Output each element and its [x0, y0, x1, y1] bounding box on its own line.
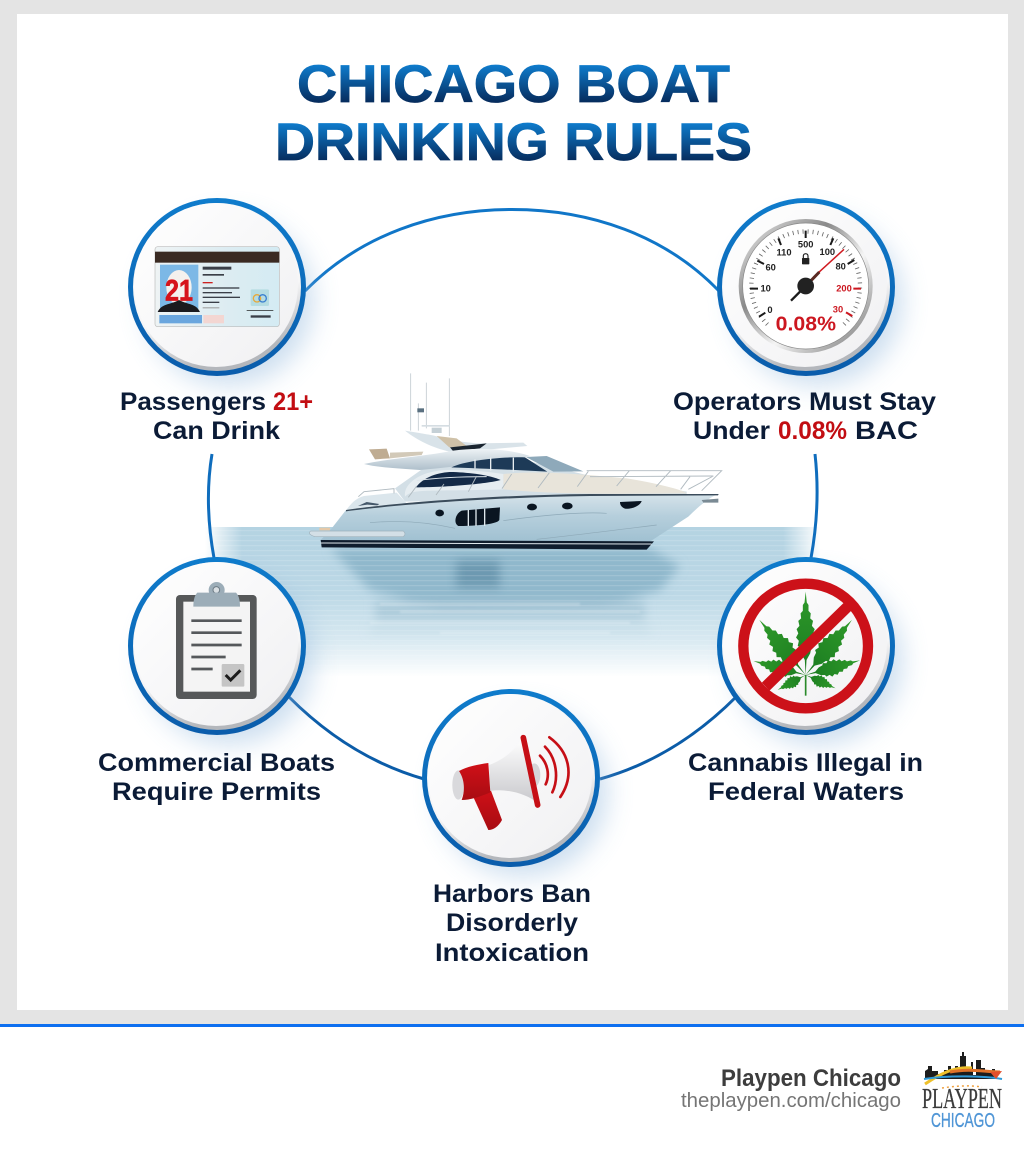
badge shadow [145, 217, 313, 385]
minor ticks [751, 231, 860, 324]
label: harbors: Intoxication [435, 939, 589, 967]
bow anchor [702, 499, 718, 503]
icon: gauge: 200 [836, 284, 852, 294]
masts [411, 373, 449, 436]
side windows [416, 472, 501, 487]
icon: gauge: 30 [833, 304, 843, 314]
label: cannabis: Cannabis Illegal in [688, 749, 923, 777]
icon: gauge: 10 [760, 284, 771, 294]
badge shadow [145, 576, 313, 744]
icon: ID card: 21 [165, 275, 193, 308]
badge rim [133, 203, 301, 371]
skyline [925, 1052, 995, 1079]
badge ring [128, 198, 306, 376]
label: operators: Operators Must Stay [673, 388, 936, 416]
icon: gauge: 0.08% [776, 313, 836, 336]
label: harbors: Harbors Ban [433, 880, 591, 908]
title [275, 55, 752, 172]
prohibition sign [743, 584, 868, 708]
hull [321, 494, 719, 543]
connecting ring arcs [208, 210, 817, 779]
yacht [309, 373, 722, 550]
icon: gauge: 500 [798, 240, 813, 250]
radar array [417, 408, 450, 433]
icon: gauge: 60 [765, 262, 776, 272]
water streaks [370, 603, 640, 634]
label: cannabis [688, 749, 923, 806]
swim platform [309, 531, 405, 537]
label: passengers: Can Drink [153, 417, 280, 445]
label: passengers [120, 388, 313, 445]
label: operators: Under [693, 417, 770, 445]
label: passengers: Passengers [120, 388, 266, 416]
label: harbors [433, 880, 591, 967]
badge shadow [439, 708, 607, 876]
badge ring [717, 557, 895, 735]
icon: gauge: 80 [835, 262, 846, 272]
badge rim [133, 562, 301, 730]
icon: ID card [155, 247, 279, 327]
badge rim [427, 694, 595, 862]
footer brand text [681, 1065, 901, 1112]
stern bulwark [346, 493, 407, 511]
cannabis leaf [751, 592, 862, 695]
needle [791, 286, 806, 301]
label: operators: 0.08% [778, 417, 847, 445]
railings [358, 471, 722, 497]
label: commercial boats: Commercial Boats [98, 749, 335, 777]
badge shadow [734, 576, 902, 744]
swooshes [925, 1068, 972, 1084]
icon: no cannabis [743, 584, 868, 708]
footer logo: CHICAGO [931, 1110, 995, 1132]
badge: cannabis prohibited [717, 557, 902, 744]
badge ring [128, 557, 306, 735]
hull windows [435, 501, 642, 526]
badge disc [723, 562, 887, 726]
label: operators: BAC [855, 417, 918, 445]
water with reflection [205, 527, 820, 677]
title: DRINKING RULES [275, 113, 752, 172]
boat reflection [330, 548, 680, 633]
badge shadow [734, 217, 902, 385]
badge disc [428, 694, 592, 858]
icon: clipboard [176, 582, 257, 699]
badge: passengers ID card [128, 198, 313, 385]
flybridge canopy [405, 431, 527, 452]
badge rim [722, 562, 890, 730]
badge ring [717, 198, 895, 376]
deck [503, 473, 687, 494]
label: passengers: 21+ [273, 388, 313, 416]
label: operators [673, 388, 936, 445]
badge: megaphone [422, 689, 607, 876]
icon: gauge [739, 219, 873, 353]
badge disc [134, 203, 298, 367]
upper deck swoop [364, 449, 530, 470]
label: cannabis: Federal Waters [708, 778, 904, 806]
badge disc [723, 203, 887, 367]
label: harbors: Disorderly [446, 909, 578, 937]
label: commercial boats [98, 749, 335, 806]
hull contour lines [370, 513, 657, 539]
icon: gauge: 0 [767, 305, 773, 315]
footer accent line [0, 1024, 1024, 1027]
badge ring [422, 689, 600, 867]
major ticks [750, 231, 854, 317]
icon: gauge: 110 [776, 247, 792, 257]
badge: BAC gauge [717, 198, 902, 385]
superstructure base [395, 460, 687, 502]
title: CHICAGO BOAT [297, 55, 730, 114]
footer brand text: theplaypen.com/chicago [681, 1090, 901, 1112]
badge: permits clipboard [128, 557, 313, 744]
windshield [451, 457, 547, 472]
hull window bars [468, 509, 485, 526]
footer logo [922, 1052, 1002, 1132]
aft cushion [369, 449, 390, 459]
waterline stripe [321, 540, 654, 550]
label: commercial boats: Require Permits [112, 778, 321, 806]
icon: megaphone [452, 737, 568, 830]
footer band [0, 1027, 1024, 1154]
stern vents [358, 502, 379, 506]
footer brand text: Playpen Chicago [721, 1065, 901, 1092]
badge disc [134, 562, 298, 726]
icon: gauge: 100 [820, 247, 835, 257]
badge rim [722, 203, 890, 371]
lock [802, 254, 809, 264]
